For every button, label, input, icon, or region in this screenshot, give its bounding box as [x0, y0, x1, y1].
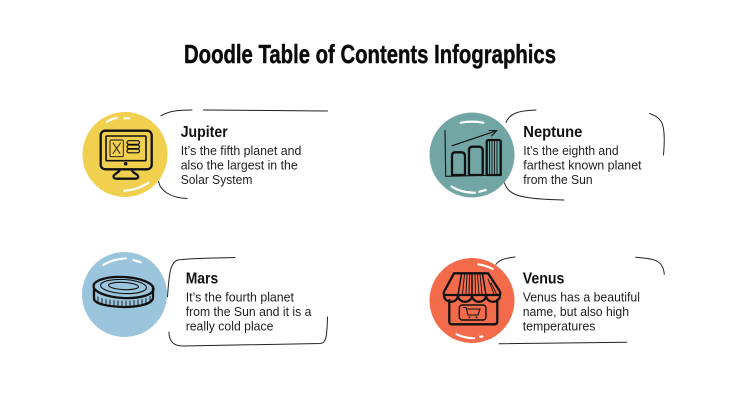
text: Venus: name, but also high: [523, 304, 629, 319]
doodle frame: Neptune: [504, 110, 664, 200]
panel: Mars: [82, 252, 328, 346]
text: Jupiter: It’s the fifth planet and: [181, 143, 301, 158]
text: Neptune: Neptune: [523, 124, 583, 141]
text: Jupiter: [181, 124, 301, 187]
text: Neptune: from the Sun: [523, 172, 593, 187]
text: Mars: from the Sun and it is a: [186, 304, 312, 319]
text: Mars: really cold place: [186, 318, 273, 334]
text: Jupiter: Jupiter: [181, 124, 228, 141]
circle highlights: Venus: [457, 264, 493, 338]
icon circle: blue: [82, 252, 167, 337]
circle highlights: Jupiter: [107, 118, 148, 191]
text: Mars: [186, 270, 312, 334]
panel: Neptune: [430, 110, 664, 200]
icon: rising bar chart: [445, 130, 501, 176]
text: Neptune: farthest known planet: [523, 158, 642, 173]
doodle frame: Mars: [168, 258, 328, 346]
icon circle: yellow: [82, 112, 168, 197]
text: Neptune: [523, 124, 642, 187]
icon: coin: [93, 275, 154, 307]
text: Jupiter: Solar System: [181, 172, 252, 187]
icon: shop with cart: [444, 273, 500, 324]
icon: computer monitor: [101, 131, 152, 179]
doodle frame: Venus: [496, 257, 664, 344]
text: Jupiter: also the largest in the: [181, 158, 298, 173]
circle highlights: Neptune: [452, 122, 486, 193]
icon circle: red: [430, 258, 514, 343]
panel: Venus: [430, 257, 664, 344]
doodle frame: Jupiter: [158, 110, 328, 198]
title: Doodle Table of Contents Infographics: [184, 39, 556, 69]
text: Venus: Venus: [523, 270, 564, 288]
text: Venus: [523, 270, 640, 333]
text: Venus: temperatures: [523, 318, 595, 333]
text: Mars: Mars: [186, 270, 218, 288]
icon circle: teal: [430, 112, 514, 198]
text: Venus: Venus has a beautiful: [523, 289, 640, 304]
text: Mars: It’s the fourth planet: [186, 290, 294, 304]
text: Neptune: It’s the eighth and: [523, 143, 619, 158]
circle highlights: Mars: [103, 258, 141, 265]
panel: Jupiter: [82, 110, 328, 198]
